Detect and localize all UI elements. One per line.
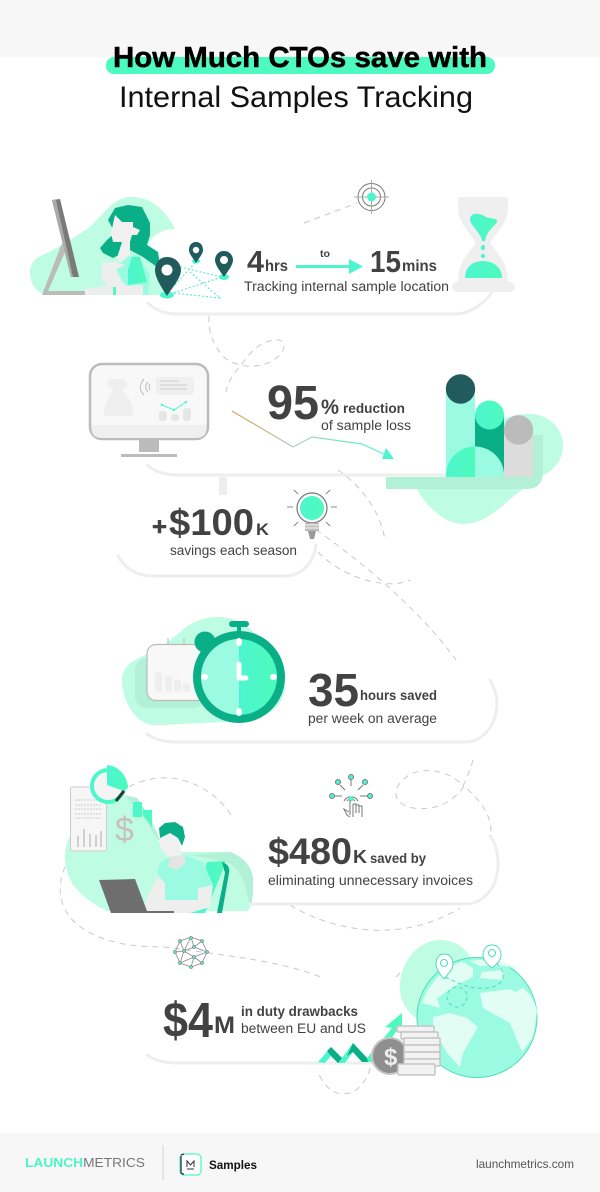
panel: duty drawbacks	[147, 936, 537, 1078]
card outline	[118, 545, 316, 576]
stat: 4hrs to 15mins: to	[320, 249, 330, 260]
stat: $480K saved by: saved by	[370, 851, 426, 866]
stat: 35 hours saved: 35	[308, 664, 359, 716]
top band	[0, 0, 600, 57]
stat: +$100K: savings each season	[170, 543, 297, 558]
stat: 95% reduction: reduction	[343, 401, 405, 416]
card outline	[250, 836, 498, 904]
map pins	[155, 242, 233, 298]
stat: 95% reduction: of sample loss	[321, 418, 411, 433]
woman illustration	[30, 197, 175, 295]
trend line	[232, 411, 394, 459]
person with laptop illustration	[65, 765, 253, 913]
stat: +$100K	[152, 502, 297, 558]
title: Internal Samples Tracking	[119, 81, 473, 114]
card outline	[147, 1055, 380, 1063]
rising arrow	[318, 1013, 402, 1063]
card outline	[147, 680, 497, 742]
icon: touch network	[330, 774, 372, 817]
coin stack: $	[384, 1044, 398, 1071]
stat: $4M duty drawbacks	[163, 994, 366, 1048]
stat: 95% reduction: 95	[267, 377, 319, 430]
panel: hours saved	[122, 617, 497, 742]
stat: 4hrs to 15mins: mins	[402, 258, 437, 275]
dashed connector lines	[60, 203, 491, 1094]
stat: +$100K: K	[256, 520, 270, 539]
stat: 95% reduction	[267, 377, 411, 433]
stat: $4M duty drawbacks: in duty drawbacks	[241, 1004, 358, 1019]
coin stack	[372, 1026, 440, 1075]
stat: 4hrs to 15mins: 4	[247, 244, 265, 279]
footer	[0, 1133, 600, 1192]
website: launchmetrics.com	[476, 1157, 574, 1171]
logo: Samples	[180, 1154, 257, 1175]
icon: monitor	[90, 364, 208, 457]
stat: $480K saved by: $480	[268, 831, 352, 872]
stopwatch illustration	[122, 617, 285, 725]
stat: 35 hours saved: per week on average	[308, 711, 437, 726]
panel: sample loss	[90, 364, 563, 524]
stat: 4hrs to 15mins: 15	[370, 244, 401, 279]
stat: 95% reduction: %	[321, 396, 339, 419]
title: How Much CTOs save with	[113, 42, 487, 74]
stat: 4hrs to 15mins	[244, 244, 449, 294]
icon: target	[354, 180, 389, 214]
panel: saved invoices	[65, 765, 498, 913]
icon: hourglass	[452, 197, 515, 292]
stat: +$100K: $100	[169, 502, 254, 543]
card outline	[147, 465, 445, 475]
stat: $480K saved by: K	[353, 847, 367, 867]
person with laptop illustration: $	[115, 811, 134, 849]
logo: Launchmetrics: LAUNCH METRICS	[25, 1156, 145, 1170]
stat: $4M duty drawbacks: between EU and US	[241, 1021, 366, 1036]
bar chart cylinders	[386, 374, 563, 524]
title	[106, 42, 495, 114]
stat: 4hrs to 15mins: Tracking internal sample location	[244, 279, 449, 294]
panel: tracking location	[30, 180, 515, 314]
stat: $4M duty drawbacks: $4	[163, 994, 213, 1048]
stat: $4M duty drawbacks: M	[214, 1012, 235, 1039]
panel: savings each season	[118, 490, 337, 576]
icon: network globe	[174, 936, 208, 968]
stat: 35 hours saved: hours saved	[360, 688, 437, 703]
stat: $480K saved by: eliminating unnecessary invoices	[268, 873, 473, 888]
stat: 4hrs to 15mins: hrs	[265, 258, 288, 275]
stat: 35 hours saved	[308, 664, 437, 726]
globe illustration	[400, 940, 537, 1078]
logo: Samples: Samples	[209, 1158, 257, 1172]
stat: +$100K: +	[152, 513, 167, 541]
stat: $480K saved by	[268, 831, 473, 888]
icon: light bulb	[287, 490, 337, 539]
card outline	[146, 229, 200, 314]
connector	[219, 477, 227, 495]
